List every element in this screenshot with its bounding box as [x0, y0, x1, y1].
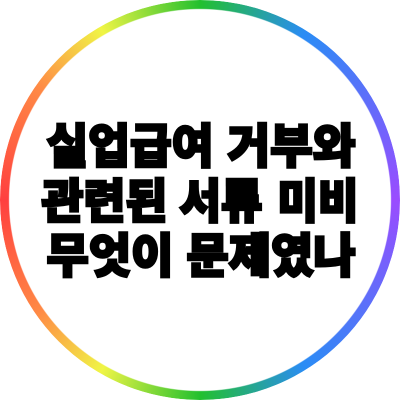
title line 2: [42, 175, 358, 228]
title line 2: 관련된: [42, 175, 168, 228]
title line 2: 미비: [278, 175, 358, 228]
title line 3: 문제였나: [186, 230, 356, 282]
title line 2: 서류: [180, 175, 262, 228]
title line 1: [46, 120, 356, 173]
title line 1: 거부와: [228, 120, 356, 173]
title line 3: [46, 230, 356, 282]
title line 1: 실업급여: [46, 120, 214, 173]
title line 3: 무엇이: [46, 230, 174, 282]
